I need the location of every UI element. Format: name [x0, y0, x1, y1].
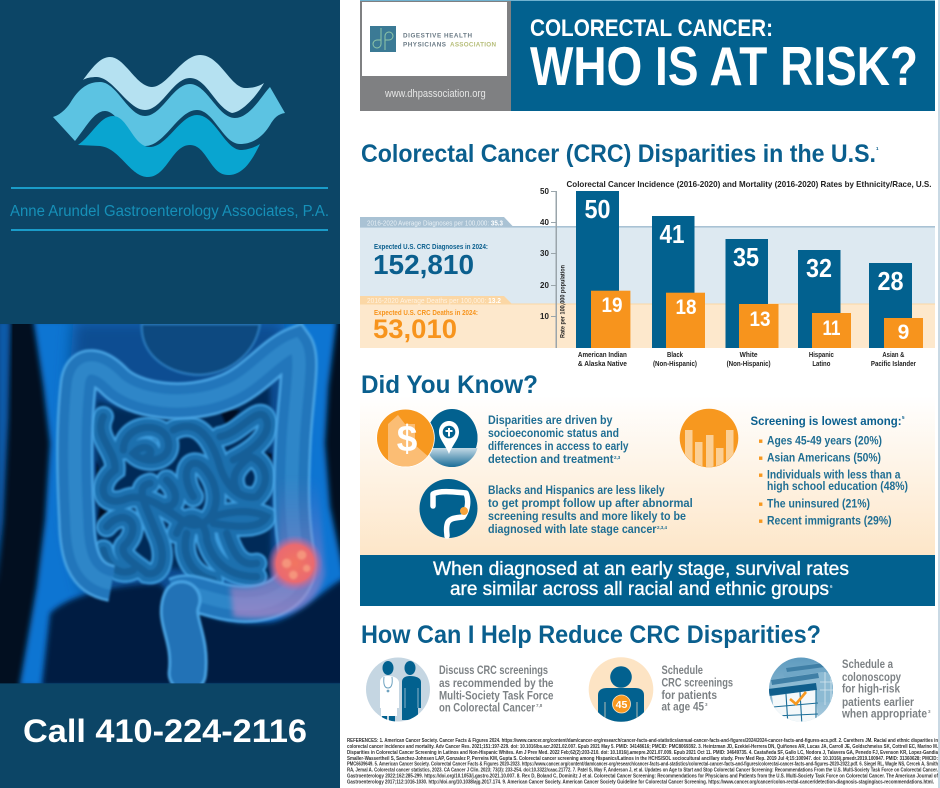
panel: expected diagnoses and deaths: [360, 217, 935, 348]
bars: American Indian and Alaska Native: American Indian: [578, 350, 627, 359]
bars: White: [726, 239, 778, 368]
stomach: [142, 324, 260, 375]
bars: Asian and Pacific Islander: 9: [898, 321, 909, 344]
callout: survival rates banner: [360, 555, 935, 606]
y axis: 50: [540, 187, 549, 196]
icon: dollar sign and map pin: $: [397, 418, 418, 459]
practice name: Anne Arundel Gastroenterology Associates, P.A.: [10, 203, 329, 220]
text: colonoscopy for high risk: patients earlier: [842, 697, 914, 709]
text: socioeconomic disparities: [488, 415, 629, 466]
y axis: [540, 187, 566, 348]
stat: expected deaths: [373, 308, 478, 344]
y axis: 10: [540, 312, 549, 321]
y axis: 20: [540, 281, 549, 290]
bars: Black: 18: [676, 296, 697, 319]
icon: dollar sign and map pin: [376, 409, 478, 470]
icon: colon: [420, 479, 478, 538]
text: colonoscopy for high risk: for high-risk: [842, 684, 901, 696]
text: schedule at 45: [662, 665, 733, 714]
y axis: 30: [540, 249, 549, 258]
bars: American Indian and Alaska Native: 19: [602, 294, 622, 317]
stat: expected deaths: Expected U.S. CRC Deaths in 2024:: [374, 308, 478, 317]
illustration: glowing intestines with tumor: [0, 320, 347, 687]
references: [347, 738, 938, 786]
text: socioeconomic disparities: Disparities are driven by: [488, 415, 613, 427]
icon: practice wave logo: [53, 55, 285, 177]
bars: Black: 41: [660, 219, 684, 249]
text: discuss screenings: Discuss CRC screenings: [439, 665, 548, 677]
heading: CRC disparities: 1: [876, 146, 879, 151]
text: discuss screenings: as recommended by the: [439, 678, 554, 690]
list: lowest screening groups: high school education (48%): [767, 481, 908, 493]
text: discuss screenings: 7,8: [536, 703, 543, 708]
label: average diagnoses: 2016-2020 Average Diagnoses per 100,000: 35.3: [367, 218, 503, 228]
text: colonoscopy for high risk: [841, 659, 931, 720]
stat: expected deaths: 53,010: [373, 314, 457, 344]
bars: Asian and Pacific Islander: 28: [878, 266, 904, 296]
list: lowest screening groups: Screening is lowest among:: [750, 416, 902, 428]
text: discuss screenings: Multi-Society Task Force: [439, 690, 554, 702]
text: schedule at 45: CRC screenings: [662, 678, 733, 690]
label: average deaths: 2016-2020 Average Deaths per 100,000: 13.2: [367, 296, 501, 305]
bars: White: 13: [750, 308, 770, 331]
text: schedule at 45: for patients: [662, 690, 717, 702]
heading: did you know: Did You Know?: [361, 371, 538, 399]
panel: did you know: [360, 371, 935, 556]
bars: Hispanic Latino: 11: [822, 317, 841, 340]
bars: American Indian and Alaska Native: 50: [584, 194, 610, 224]
text: colonoscopy for high risk: Schedule a: [842, 659, 894, 671]
panel: recommendations: [366, 657, 931, 726]
list: lowest screening groups: [750, 415, 908, 528]
bar chart: incidence and mortality by ethnicity: [540, 179, 932, 368]
text: follow up and late stage: [488, 485, 693, 536]
y axis: 40: [540, 218, 549, 227]
text: follow up and late stage: diagnosed with late stage cancer: [488, 524, 657, 536]
text: follow up and late stage: Blacks and Hispanics are less likely: [488, 485, 665, 497]
list: lowest screening groups: The uninsured (21%): [767, 498, 870, 510]
heading: how can I help: How Can I Help Reduce CRC Disparities?: [361, 621, 821, 649]
text: follow up and late stage: screening results and more likely to be: [488, 511, 686, 523]
bars: Black: Black: [667, 350, 684, 359]
text: discuss screenings: [439, 665, 554, 714]
list: lowest screening groups: Ages 45-49 years (20%): [767, 436, 882, 448]
text: socioeconomic disparities: 2,3: [614, 455, 621, 460]
logo: DHPA: PHYSICIANS: [403, 42, 446, 48]
text: follow up and late stage: 2,3,4: [657, 525, 668, 530]
logo: DHPA: ASSOCIATION: [450, 42, 496, 48]
icon: calendar with check: [769, 658, 833, 722]
bars: Asian and Pacific Islander: [869, 263, 923, 368]
header banner: [360, 0, 935, 111]
callout: survival rates banner: 6: [830, 584, 833, 589]
stat: expected diagnoses: 152,810: [373, 249, 474, 280]
text: schedule at 45: at age 45: [662, 702, 705, 714]
list: lowest screening groups: Recent immigrants (29%): [767, 516, 892, 528]
logo: DHPA: [370, 26, 496, 52]
icon: patient age 45: [589, 657, 653, 722]
bars: White: White: [740, 350, 758, 359]
text: socioeconomic disparities: socioeconomic status and: [488, 428, 619, 440]
bars: Hispanic Latino: Hispanic: [809, 350, 834, 359]
text: colonoscopy for high risk: colonoscopy: [842, 672, 901, 684]
bars: Hispanic Latino: [798, 250, 851, 368]
list: lowest screening groups: Asian Americans (50%): [767, 452, 881, 464]
text: colonoscopy for high risk: 3: [928, 709, 931, 714]
text: schedule at 45: Schedule: [662, 665, 703, 677]
icon: patient age 45: 45: [616, 699, 627, 711]
text: schedule at 45: 3: [705, 702, 708, 707]
icon: doctor and patient: [366, 658, 430, 722]
right edge strip: [938, 0, 940, 788]
stat: expected diagnoses: Expected U.S. CRC Diagnoses in 2024:: [374, 242, 488, 251]
bars: American Indian and Alaska Native: & Alaska Native: [578, 359, 627, 368]
bars: Hispanic Latino: Latino: [812, 359, 831, 368]
bars: White: 35: [733, 242, 759, 272]
title: COLORECTAL CANCER:: [530, 15, 773, 42]
text: follow up and late stage: to get prompt follow up after abnormal: [488, 498, 693, 510]
y axis: Rate per 100,000 population: [560, 265, 566, 338]
website: www.dhpassociation.org: [384, 88, 486, 100]
bars: Asian and Pacific Islander: Asian &: [882, 350, 905, 359]
list: lowest screening groups: 5: [902, 415, 905, 420]
panel: left practice branding: [0, 0, 347, 788]
bars: Black: [652, 216, 705, 368]
bars: American Indian and Alaska Native: [576, 191, 630, 368]
icon: bar chart circle: [680, 409, 738, 470]
text: socioeconomic disparities: differences in access to early: [488, 441, 629, 453]
phone number: Call 410-224-2116: [23, 713, 307, 749]
text: socioeconomic disparities: detection and treatment: [488, 454, 614, 466]
bars: Asian and Pacific Islander: Pacific Islander: [871, 359, 916, 368]
list: lowest screening groups: Individuals with less than a: [767, 470, 901, 482]
bars: Hispanic Latino: 32: [806, 253, 832, 283]
callout: survival rates banner: When diagnosed at an early stage, survival rates: [433, 559, 849, 580]
logo: DHPA: DIGESTIVE HEALTH: [403, 32, 472, 40]
heading: CRC disparities: Colorectal Cancer (CRC) Disparities in the U.S.: [361, 140, 876, 168]
text: colonoscopy for high risk: when appropriate: [841, 708, 927, 720]
bars: Black: (Non-Hispanic): [653, 359, 697, 368]
text: discuss screenings: on Colorectal Cancer: [439, 702, 535, 714]
callout: survival rates banner: are similar across all racial and ethnic groups: [450, 579, 829, 600]
bars: White: (Non-Hispanic): [727, 359, 771, 368]
